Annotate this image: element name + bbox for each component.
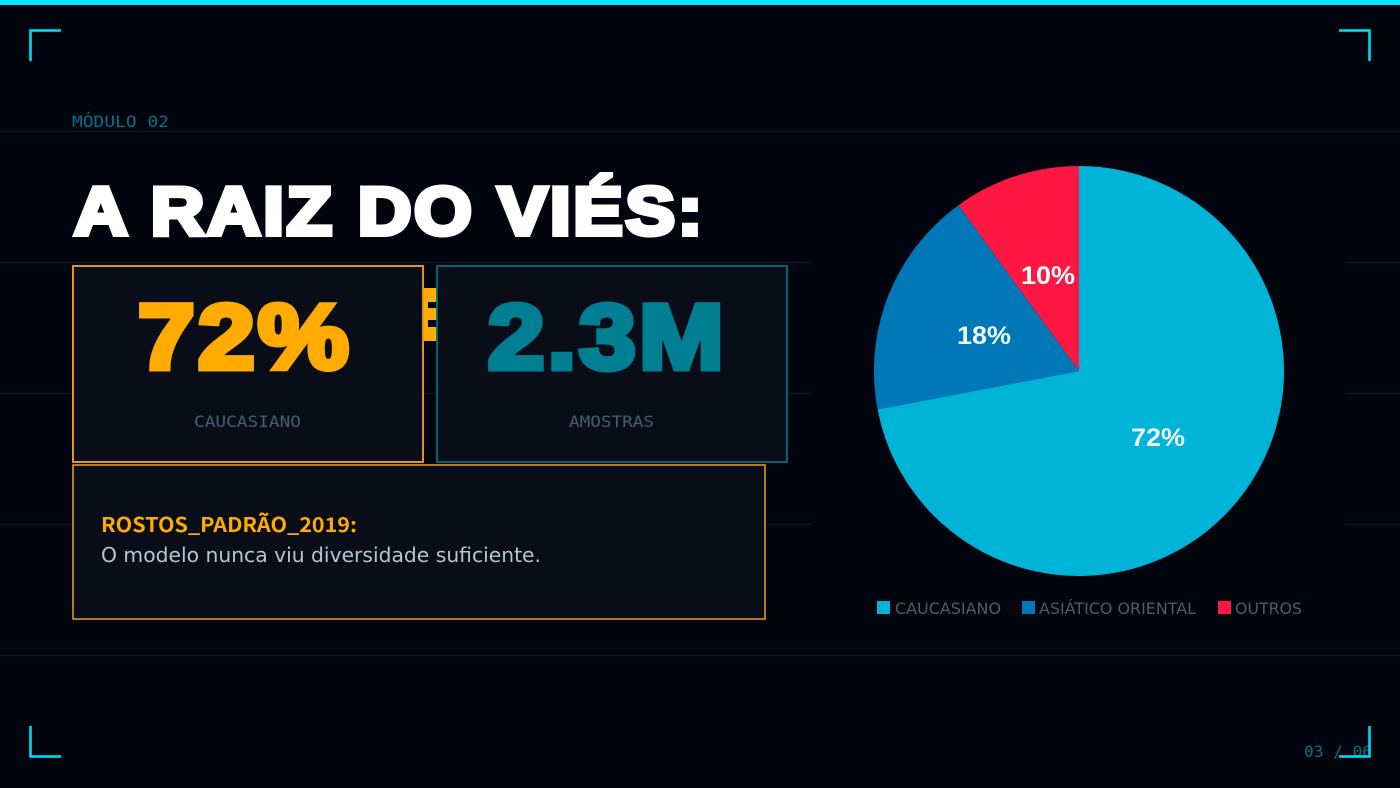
- corner bracket: top right: [1339, 30, 1370, 61]
- stat label: amostras: AMOSTRAS: [569, 412, 654, 431]
- panel: callout: [73, 465, 765, 619]
- hidden title second line fragment: [424, 288, 437, 341]
- pie value: 18%: 18%: [957, 322, 1011, 350]
- module label: MÓDULO 02: [72, 112, 169, 131]
- legend label: caucasiano: CAUCASIANO: [895, 599, 1001, 618]
- corner bracket: bottom left: [30, 726, 61, 756]
- title: A RAIZ DO VIÉS:: [74, 174, 705, 250]
- legend label: asiático oriental: ASIÁTICO ORIENTAL: [1039, 599, 1196, 618]
- pie chart: [874, 166, 1284, 576]
- panel: caucasiano stat: [73, 266, 423, 462]
- page number: 03 / 06: [1304, 742, 1372, 761]
- slice: caucasiano 72%: [878, 166, 1284, 576]
- callout heading: ROSTOS_PADRÃO_2019:: [101, 509, 357, 538]
- top accent bar: [0, 0, 1400, 5]
- stat label: caucasiano: CAUCASIANO: [194, 412, 301, 431]
- pie value: 10%: 10%: [1021, 262, 1075, 290]
- callout text: O modelo nunca viu diversidade suficiente.: [101, 543, 541, 567]
- pie legend: [877, 599, 1302, 618]
- stat value: 2.3M: 2.3M: [488, 286, 727, 388]
- corner bracket: top left: [30, 30, 61, 61]
- pie value: 72%: 72%: [1131, 424, 1185, 452]
- legend swatch: asiático oriental: [1022, 601, 1035, 614]
- corner bracket: bottom right: [1339, 726, 1370, 756]
- slice: asiático oriental 18%: [874, 205, 1079, 409]
- legend swatch: outros: [1218, 601, 1231, 614]
- legend swatch: caucasiano: [877, 601, 890, 614]
- slice: outros 10%: [958, 166, 1079, 371]
- panel: amostras stat: [437, 266, 787, 462]
- legend label: outros: OUTROS: [1235, 599, 1302, 618]
- stat value: 72%: 72%: [138, 286, 352, 388]
